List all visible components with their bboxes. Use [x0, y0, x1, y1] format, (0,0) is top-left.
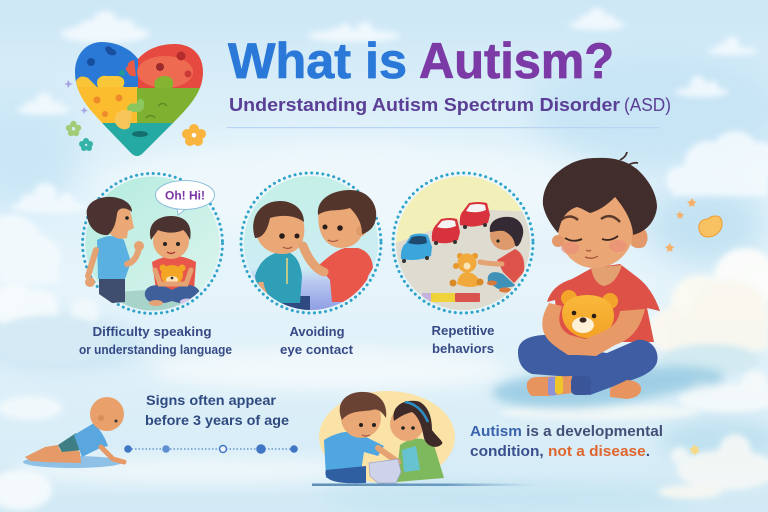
illustration: main boy hugging teddy: [493, 152, 724, 408]
boy playing: [480, 217, 524, 292]
text: developmental condition statement: condition, not a disease .: [470, 444, 650, 460]
head: [558, 195, 634, 268]
decorative flowers and stars around heart: [64, 80, 206, 151]
caption: difficulty speaking: [79, 325, 232, 357]
icon: puzzle piece heart: [75, 42, 203, 156]
legs: [518, 335, 658, 395]
caption: repetitive behaviors: [432, 324, 495, 356]
speech bubble: Oh! Hi!: [165, 188, 205, 202]
boy in red shirt reaching: [303, 246, 373, 302]
hair: [543, 158, 657, 235]
caption: difficulty speaking: Difficulty speaking: [92, 325, 212, 339]
caption: avoiding eye contact: eye contact: [280, 343, 354, 357]
caption: avoiding eye contact: [280, 325, 354, 357]
illustration: two children playing with box: [312, 391, 537, 486]
teddy: [561, 290, 618, 338]
title: Autism?: [419, 33, 614, 89]
teddy bear: [450, 253, 484, 287]
speech bubble: [156, 180, 214, 215]
girl: [390, 401, 444, 482]
caption: avoiding eye contact: Avoiding: [290, 325, 344, 339]
text: signs before 3 years: before 3 years of age: [145, 413, 290, 428]
row of toy cars: [401, 202, 490, 263]
boy: [324, 392, 398, 483]
caption: repetitive behaviors: behaviors: [432, 342, 494, 356]
subtitle: Understanding Autism Spectrum Disorder: [229, 94, 620, 115]
text: signs before 3 years: Signs often appear: [146, 393, 277, 408]
timeline: [124, 444, 298, 454]
panel: repetitive behaviors: [390, 173, 540, 320]
boy with teddy sitting: [145, 216, 200, 306]
boy in teal shirt: [253, 201, 310, 314]
panel: avoiding eye contact: [241, 173, 381, 314]
boy speaking, side view: [85, 197, 144, 303]
lower left cloud bank: [0, 283, 112, 510]
arms: [542, 303, 645, 356]
right foot: [610, 380, 641, 399]
title: [228, 33, 614, 89]
caption: repetitive behaviors: Repetitive: [432, 324, 495, 338]
toy blocks: [422, 293, 480, 302]
text: signs before 3 years: [145, 393, 290, 428]
text: developmental condition statement: [470, 424, 663, 460]
panel: difficulty speaking: [82, 174, 222, 318]
text: developmental condition statement: Autism is a developmental: [470, 424, 663, 440]
illustration: crawling baby: [23, 397, 124, 468]
boy in red shirt head: [318, 190, 376, 248]
clouds: [0, 8, 768, 283]
title: What is: [228, 33, 407, 89]
caption: difficulty speaking: or understanding language: [79, 343, 232, 357]
subtitle: (ASD): [624, 95, 671, 115]
icon: golden heart and stars: [665, 198, 722, 252]
left foot with striped sock: [527, 376, 591, 396]
right cloud bank: [500, 248, 768, 499]
icon: small yellow flower: [690, 444, 700, 456]
box: [369, 459, 401, 483]
shirt: [547, 264, 660, 342]
